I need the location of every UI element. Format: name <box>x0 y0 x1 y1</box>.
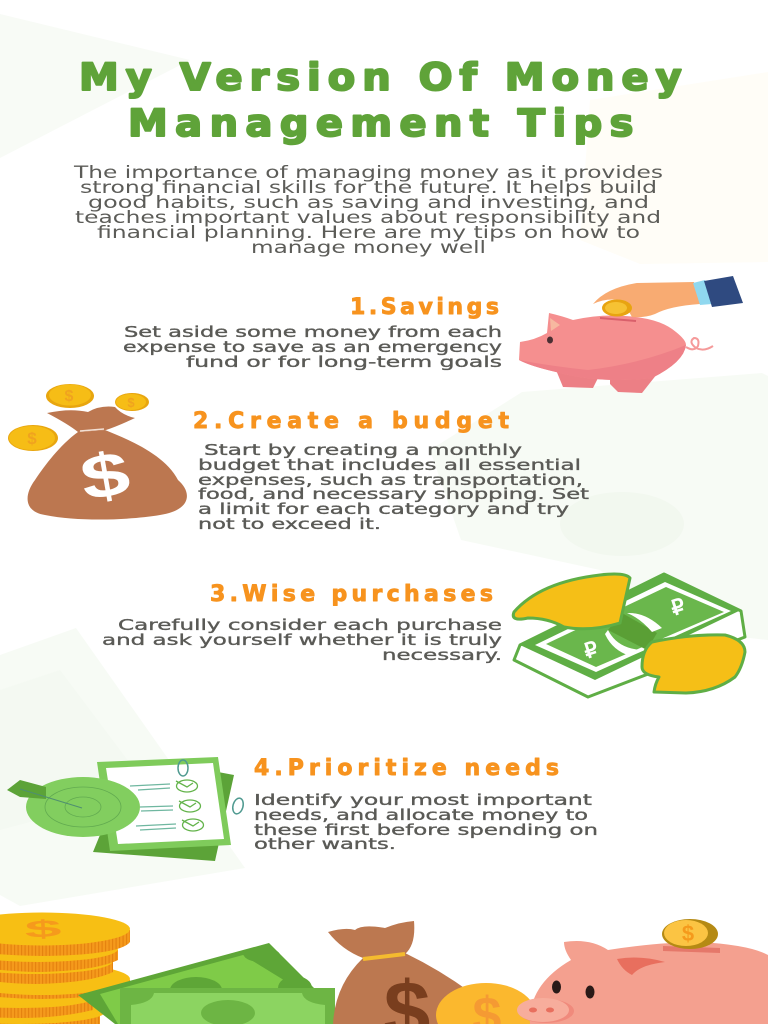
icon: money bag with coins: $ <box>65 388 74 405</box>
section 1: savings text: expense to save as an emergency <box>123 338 502 356</box>
section 2: create a budget text: Start by creating a monthly <box>204 441 522 459</box>
section 4: prioritize needs text: other wants. <box>254 835 396 853</box>
section 2: create a budget text: budget that includes all essential <box>198 456 581 474</box>
intro text: manage money well <box>251 238 486 257</box>
section 2: create a budget text: expenses, such as transportation, <box>198 471 583 489</box>
intro text: strong financial skills for the future. It helps build <box>80 178 657 197</box>
section 1: savings text: Set aside some money from each <box>124 323 502 341</box>
section 2: create a budget text: not to exceed it. <box>198 515 381 533</box>
section 3: wise purchases text: and ask yourself whether it is truly <box>102 631 502 649</box>
section 1: savings heading: 1.Savings <box>350 295 499 320</box>
section 4: prioritize needs text <box>254 791 598 853</box>
illustration: gold coin <box>436 983 536 1024</box>
section 4: prioritize needs text: these first before spending on <box>254 821 598 839</box>
section 2: create a budget text <box>198 441 589 533</box>
section 3: wise purchases text: necessary. <box>382 646 502 664</box>
illustration: banknotes <box>78 943 335 1024</box>
title: Management Tips <box>128 102 633 146</box>
icon: money bag with coins: $ <box>127 395 135 410</box>
intro text: The importance of managing money as it provides <box>73 163 663 182</box>
section 4: prioritize needs text: Identify your most important <box>254 791 592 809</box>
icon: flying money with wings <box>513 573 745 697</box>
intro text: financial planning. Here are my tips on how to <box>97 223 640 242</box>
section 1: savings text <box>123 323 502 371</box>
icon: target and checklist <box>7 757 245 861</box>
section 4: prioritize needs text: needs, and allocate money to <box>254 806 588 824</box>
title <box>79 56 682 146</box>
intro text: teaches important values about responsibility and <box>75 208 661 227</box>
illustration: pig with coin <box>517 919 768 1024</box>
section 2: create a budget heading: 2.Create a budget <box>193 409 509 434</box>
section 3: wise purchases text <box>102 616 502 664</box>
section 4: prioritize needs heading: 4.Prioritize needs <box>254 756 559 781</box>
title: My Version Of Money <box>79 56 682 100</box>
section 2: create a budget text: food, and necessary shopping. Set <box>198 485 589 503</box>
section 3: wise purchases text: Carefully consider each purchase <box>118 616 502 634</box>
icon: money bag with coins: $ <box>75 437 135 514</box>
illustration: money bag <box>328 921 470 1024</box>
icon: flying money with wings: ₽ <box>581 637 602 663</box>
icon: money bag with coins <box>8 384 187 520</box>
icon: flying money with wings: ₽ <box>668 594 689 620</box>
icon: money bag with coins: $ <box>27 429 37 448</box>
section 3: wise purchases heading: 3.Wise purchases <box>210 582 493 607</box>
illustration: coin stack: $ <box>24 914 62 943</box>
intro text <box>73 163 663 257</box>
icon: piggy bank with hand and coin <box>519 276 743 393</box>
illustration: coin stack <box>0 912 130 1024</box>
section 1: savings text: fund or for long-term goals <box>186 353 502 371</box>
illustration: pig with coin: $ <box>682 921 694 946</box>
intro text: good habits, such as saving and investing, and <box>88 193 649 212</box>
section 2: create a budget text: a limit for each category and try <box>198 500 569 518</box>
